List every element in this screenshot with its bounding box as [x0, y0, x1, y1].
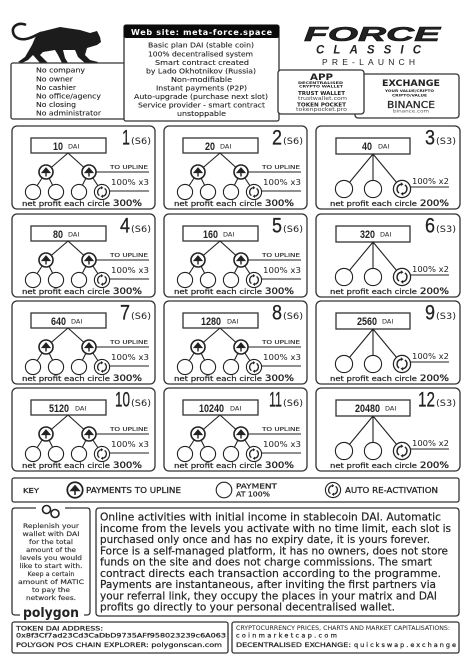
card 9: 200% — [420, 374, 449, 384]
card 10: DAI — [75, 404, 86, 412]
panel: polygon replenish: for the total — [29, 539, 73, 546]
panel: website and features: by Lado Okhotnikov (Russia) — [146, 68, 256, 76]
card 3: (S3) — [436, 137, 456, 147]
card 4: 300% — [113, 287, 142, 297]
card 12: 200% — [420, 461, 449, 471]
card 1: (S6) — [131, 137, 151, 147]
panel: polygon replenish — [12, 506, 90, 621]
card 10: 300% — [113, 461, 142, 471]
panel: polygon replenish: like to start with. — [20, 563, 82, 570]
panel: no company list: No owner — [36, 76, 73, 84]
card 4: DAI — [68, 230, 79, 238]
card 5: 300% — [265, 287, 294, 297]
panel: website and features: unstoppable — [177, 110, 226, 118]
card 8: 300% — [265, 374, 294, 384]
logo: Force Classic Pre-launch: CLASSIC — [316, 44, 422, 56]
card 3: 40 — [362, 141, 372, 153]
card 7: (S6) — [131, 312, 151, 322]
card 5: TO UPLINE — [261, 253, 301, 259]
panel: website and features: Basic plan DAI (stable coin) — [148, 42, 254, 50]
card 2: (S6) — [283, 137, 303, 147]
panel: no company list: No cashier — [36, 84, 76, 92]
panel: app: CRYPTO WALLET — [299, 84, 344, 88]
panel: app: APP — [310, 73, 333, 83]
panel: exchange: binance.com — [393, 109, 429, 115]
card 12: 12 — [418, 388, 435, 412]
panel: app: TOKEN POCKET — [297, 103, 346, 109]
card 11 — [164, 388, 307, 471]
card 10: net profit each circle — [22, 462, 110, 470]
legend: key: AT 100% — [236, 490, 271, 498]
legend: key: PAYMENT — [236, 482, 278, 490]
panel: polygon replenish: wallet with DAI — [22, 531, 80, 538]
legend: key: KEY — [23, 487, 40, 495]
card 7: 300% — [113, 374, 142, 384]
card 1: DAI — [68, 142, 79, 150]
card 12 — [316, 388, 460, 471]
card 5: (S6) — [283, 225, 303, 235]
card 4: 4 — [120, 214, 130, 238]
card 4: 80 — [53, 229, 63, 241]
card 1: 10 — [53, 141, 63, 153]
panel: description text: Force is a self-managed platform, it has no owners, does not store — [100, 546, 448, 558]
panel: website and features: 100% decentralised system — [148, 50, 253, 58]
legend: key — [12, 478, 459, 502]
logo: Force Classic Pre-launch — [304, 24, 441, 67]
card 8: DAI — [227, 317, 238, 325]
logo: Force Classic Pre-launch: FORCE — [304, 24, 441, 46]
card 4: TO UPLINE — [109, 253, 149, 259]
panel: website and features: Auto-upgrade (purchase next slot) — [134, 93, 268, 101]
card 7: 100% x3 — [111, 353, 149, 362]
panel: polygon replenish: Keep a certain — [28, 571, 75, 578]
card 3: DAI — [378, 142, 389, 150]
card 2: 100% x3 — [263, 178, 301, 187]
card 1: 100% x3 — [111, 178, 149, 187]
card 11: net profit each circle — [174, 462, 262, 470]
card 8: 100% x3 — [263, 353, 301, 362]
card 9 — [316, 301, 460, 384]
card 5: 160 — [203, 229, 218, 241]
panel: exchange: EXCHANGE — [382, 79, 440, 89]
card 12: 20480 — [355, 403, 380, 415]
card 9: net profit each circle — [330, 375, 417, 383]
panel: website and features — [124, 25, 279, 121]
card 6: 6 — [425, 214, 435, 238]
card 1: net profit each circle — [22, 200, 110, 208]
card 12: (S3) — [436, 399, 456, 409]
card 6: DAI — [380, 230, 391, 238]
panel: polygon replenish: levels you would — [20, 555, 82, 562]
panel: polygon replenish: Replenish your — [23, 523, 79, 530]
panel: description text: contract directs each transaction according to the programme. — [100, 568, 441, 580]
card 10: 5120 — [49, 403, 69, 415]
panel: description text: funds on the site and does not charge commissions. The smart — [100, 556, 432, 568]
card 7 — [12, 301, 155, 384]
panel: exchange: BINANCE — [387, 100, 435, 111]
card 5: DAI — [223, 230, 234, 238]
icon: polygon logo — [42, 506, 59, 518]
card 2: 20 — [205, 141, 215, 153]
card 7: 640 — [51, 316, 66, 328]
card 4: 100% x3 — [111, 266, 149, 275]
panel: app — [278, 70, 364, 114]
card 2: DAI — [220, 142, 231, 150]
card 1: 300% — [113, 199, 142, 209]
card 11: DAI — [230, 404, 241, 412]
legend: key: PAYMENTS TO UPLINE — [86, 486, 181, 495]
panel: no company list: No office/agency — [36, 92, 101, 100]
card 4 — [12, 214, 155, 297]
card 11: 100% x3 — [263, 440, 301, 449]
card 8: net profit each circle — [174, 375, 262, 383]
card 4: net profit each circle — [22, 288, 110, 296]
card 8: TO UPLINE — [261, 340, 301, 346]
card 5 — [164, 214, 307, 297]
card 9: 2560 — [357, 316, 377, 328]
card 6: (S3) — [436, 225, 456, 235]
panel: token address: 0x8f3Cf7ad23Cd3CaDbD9735AFf958023239c6A063 — [16, 634, 226, 640]
card 11: 10240 — [199, 403, 224, 415]
panel: no company list — [11, 63, 125, 119]
panel: market data links: DECENTRALISED EXCHANGE: — [236, 641, 351, 649]
card 8 — [164, 301, 307, 384]
panel: no company list: No closing — [36, 101, 76, 109]
card 7: net profit each circle — [22, 375, 110, 383]
card 3 — [316, 126, 460, 209]
panel: website and features: Smart contract created — [155, 59, 249, 67]
card 10 — [12, 388, 155, 471]
card 3: 3 — [425, 126, 435, 150]
panel: polygon replenish: to pay the — [32, 587, 70, 594]
card 12: net profit each circle — [330, 462, 417, 470]
card 6 — [316, 214, 460, 297]
card 11: 11 — [269, 388, 282, 412]
card 3: net profit each circle — [330, 200, 417, 208]
card 9: DAI — [382, 317, 393, 325]
card 1 — [12, 126, 155, 209]
panel: exchange: CRIPTO/VALUE — [392, 94, 428, 98]
panel: description text: Online activities with initial income in stablecoin DAI. Automatic — [100, 512, 441, 524]
panel: website and features: Service provider - smart contract — [138, 102, 265, 110]
card 2 — [164, 126, 307, 209]
panel: token address: TOKEN DAI ADDRESS: — [15, 625, 103, 633]
panel: description text — [96, 508, 459, 616]
panel: description text: profits go directly to your personal decentralised wallet. — [100, 602, 395, 614]
panel: description text: income from the levels you activate with no time limit, each slot is — [100, 523, 451, 535]
card 10: 100% x3 — [111, 440, 149, 449]
panel: market data links: coinmarketcap.com — [236, 632, 337, 640]
card 10: (S6) — [131, 399, 151, 409]
card 2: 300% — [265, 199, 294, 209]
card 3: 100% x2 — [412, 177, 449, 186]
panel: app: tokenpocket.pro — [296, 107, 347, 113]
panel: market data links — [232, 622, 459, 653]
card 9: 100% x2 — [412, 352, 449, 361]
card 8: (S6) — [283, 312, 303, 322]
card 11: TO UPLINE — [261, 427, 301, 433]
panel: website and features: Web site: meta-force.space — [131, 28, 273, 37]
card 10: 10 — [115, 388, 130, 412]
icon: black panther — [13, 24, 101, 63]
card 1: TO UPLINE — [109, 165, 149, 171]
card 8: 1280 — [201, 316, 221, 328]
legend: key: AUTO RE-ACTIVATION — [345, 486, 438, 495]
card 6: 100% x2 — [412, 265, 449, 274]
card 6: net profit each circle — [330, 288, 417, 296]
panel: polygon replenish: amount of the — [26, 547, 76, 554]
card 9: 9 — [425, 302, 435, 324]
card 10: TO UPLINE — [109, 427, 149, 433]
card 8: 8 — [272, 302, 282, 324]
panel: no company list: No company — [36, 66, 85, 74]
panel: token address: POLYGON POS CHAIN EXPLORER: polygonscan.com — [16, 641, 222, 649]
card 2: net profit each circle — [174, 200, 262, 208]
panel: app: TRUST WALLET — [298, 91, 345, 97]
panel: polygon replenish: amount of MATIC — [18, 579, 85, 586]
card 2: 2 — [272, 126, 282, 150]
panel: exchange: YOUR VALUE/CRIPTO — [384, 89, 434, 93]
card 6: 200% — [420, 287, 449, 297]
card 11: (S6) — [283, 399, 303, 409]
card 12: DAI — [385, 404, 396, 412]
panel: description text: your referral link, they occupy the places in your matrix and DAI — [100, 590, 437, 602]
card 6: 320 — [360, 229, 375, 241]
logo: Force Classic Pre-launch: PRE-LAUNCH — [322, 57, 415, 67]
panel: description text: Payments are instantaneous, after inviting the first partners via — [100, 579, 436, 591]
card 5: 5 — [272, 214, 282, 238]
card 3: 200% — [420, 199, 449, 209]
card 4: (S6) — [131, 225, 151, 235]
panel: website and features: Non-modifiable — [171, 76, 232, 84]
panel: token address — [12, 622, 228, 653]
card 9: (S3) — [436, 312, 456, 322]
panel: market data links: CRYPTOCURRENCY PRICES, CHARTS AND MARKET CAPITALISATIONS: — [236, 625, 450, 632]
panel: polygon replenish: network fees. — [26, 595, 76, 602]
panel: website and features: Instant payments (P2P) — [156, 84, 247, 92]
panel: app: trustwallet.com — [298, 96, 347, 102]
card 2: TO UPLINE — [261, 165, 301, 171]
panel: no company list: No administrator — [36, 110, 101, 118]
card 1: 1 — [122, 126, 130, 150]
card 11: 300% — [265, 461, 294, 471]
card 7: TO UPLINE — [109, 340, 149, 346]
panel: app: DECENTRALISED — [298, 81, 343, 85]
panel: polygon replenish: polygon — [23, 605, 79, 621]
card 5: net profit each circle — [174, 288, 262, 296]
card 7: DAI — [71, 317, 82, 325]
card 7: 7 — [120, 302, 130, 324]
panel: exchange — [355, 74, 459, 118]
card 12: 100% x2 — [412, 439, 449, 448]
panel: market data links: quickswap.exchange — [354, 641, 456, 649]
panel: description text: purchased only once and has no expiry date, it is yours forever. — [100, 534, 430, 546]
card 5: 100% x3 — [263, 266, 301, 275]
